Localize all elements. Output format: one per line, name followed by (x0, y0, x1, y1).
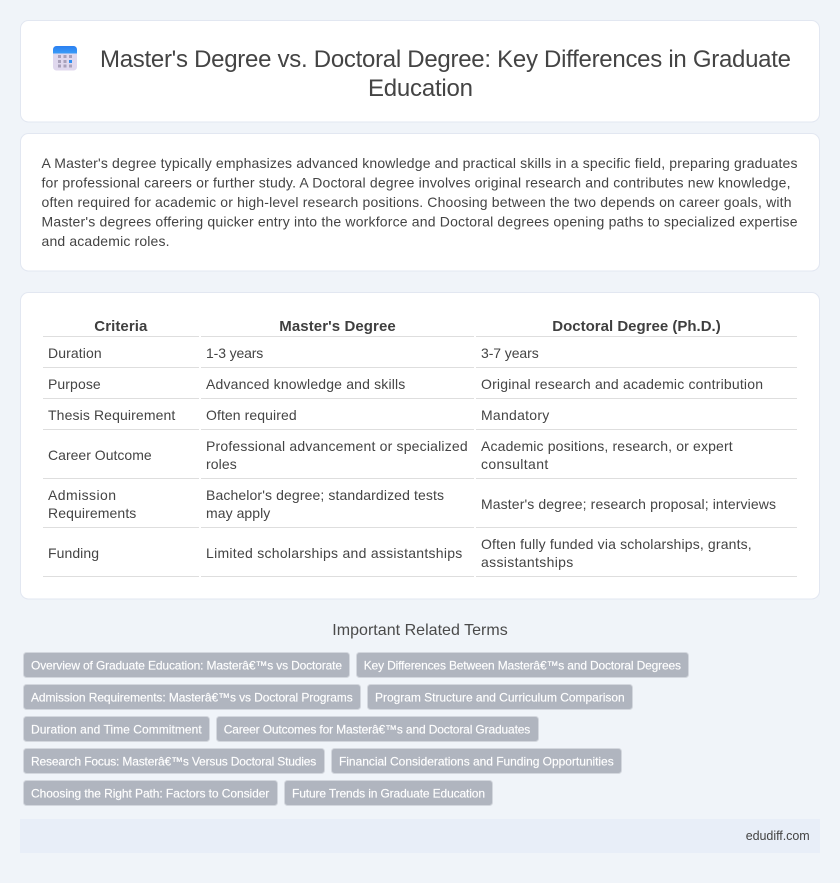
table row: admission requirements: Bachelor's degree; standardized tests (206, 487, 444, 503)
table row: career outcome: Professional advancement or specialized (206, 438, 468, 454)
table row: purpose: Advanced knowledge and skills (206, 376, 405, 392)
table row: thesis requirement (48, 407, 549, 423)
panel: summary paragraph (20, 134, 820, 271)
table row: thesis requirement: Thesis Requirement (48, 407, 175, 423)
panel: related term tags (24, 652, 688, 806)
table row: admission requirements: Requirements (48, 505, 136, 521)
tag (284, 780, 492, 806)
tag: Financial Considerations and Funding Opportunities (339, 754, 614, 768)
table header row (94, 318, 721, 335)
tag (24, 684, 360, 710)
table row: admission requirements (48, 487, 776, 521)
title: Education (368, 75, 473, 102)
heading: important related terms: Important Related Terms (332, 622, 508, 639)
table row: funding: Often fully funded via scholarships, grants, (481, 536, 752, 552)
tag: Key Differences Between Masterâ€™s and Doctoral Degrees (364, 658, 681, 672)
table row: thesis requirement: Often required (206, 407, 297, 423)
table row: admission requirements: Admission (48, 487, 116, 503)
table row: admission requirements: may apply (206, 505, 270, 521)
tag (24, 780, 278, 806)
text block: summary: for professional careers or further study. A Doctoral degree involves original research and contributes new knowledge, (42, 174, 790, 190)
icon: calendar (53, 46, 77, 70)
table row: purpose: Original research and academic contribution (481, 376, 763, 392)
panel: title header (20, 20, 820, 122)
table row: duration: 3-7 years (481, 345, 539, 361)
tag: Overview of Graduate Education: Masterâ€™s vs Doctorate (31, 658, 342, 672)
table row: purpose: Purpose (48, 376, 101, 392)
text block: summary: A Master's degree typically emphasizes advanced knowledge and practical skills in a specific field, preparing graduates (42, 155, 798, 171)
table row: career outcome: roles (206, 456, 237, 472)
text block: summary (42, 155, 798, 249)
table row: funding: Funding (48, 545, 99, 561)
table header row: Criteria (94, 318, 148, 335)
table row: career outcome: consultant (481, 456, 548, 472)
footer (20, 819, 820, 853)
text block: summary: and academic roles. (42, 233, 170, 249)
tag: Choosing the Right Path: Factors to Consider (31, 786, 269, 800)
table row: duration: Duration (48, 345, 102, 361)
text block: summary: often required for academic or high-level research positions. Choosing between the two depends on career goals, with (42, 194, 792, 210)
tag (356, 652, 688, 678)
table row: funding: assistantships (481, 554, 573, 570)
title (100, 46, 791, 102)
tag: Research Focus: Masterâ€™s Versus Doctoral Studies (31, 754, 316, 768)
tag (24, 748, 324, 774)
table row: career outcome (48, 438, 733, 472)
tag (24, 652, 350, 678)
table row: thesis requirement: Mandatory (481, 407, 549, 423)
text block: summary: Master's degrees offering quicker entry into the workforce and Doctoral degrees opening paths to specialized expertise (42, 214, 798, 230)
table row: duration (48, 345, 539, 361)
tag: Program Structure and Curriculum Comparison (375, 690, 625, 704)
tag (368, 684, 632, 710)
table row: duration: 1-3 years (206, 345, 263, 361)
table row: career outcome: Career Outcome (48, 447, 152, 463)
tag (216, 716, 538, 742)
table header row: Master's Degree (279, 318, 396, 335)
table header row: Doctoral Degree (Ph.D.) (552, 318, 721, 335)
panel: comparison table (20, 292, 820, 599)
table row: purpose (48, 376, 763, 392)
table row: career outcome: Academic positions, research, or expert (481, 438, 733, 454)
tag: Career Outcomes for Masterâ€™s and Doctoral Graduates (224, 722, 530, 736)
footer: edudiff.com (746, 829, 810, 843)
tag: Future Trends in Graduate Education (292, 786, 485, 800)
tag (332, 748, 622, 774)
table row: admission requirements: Master's degree; research proposal; interviews (481, 496, 776, 512)
table row: funding (48, 536, 752, 570)
tag: Duration and Time Commitment (31, 722, 202, 736)
tag (24, 716, 210, 742)
table row: funding: Limited scholarships and assistantships (206, 545, 462, 561)
tag: Admission Requirements: Masterâ€™s vs Doctoral Programs (31, 690, 353, 704)
title: Master's Degree vs. Doctoral Degree: Key Differences in Graduate (100, 46, 791, 73)
